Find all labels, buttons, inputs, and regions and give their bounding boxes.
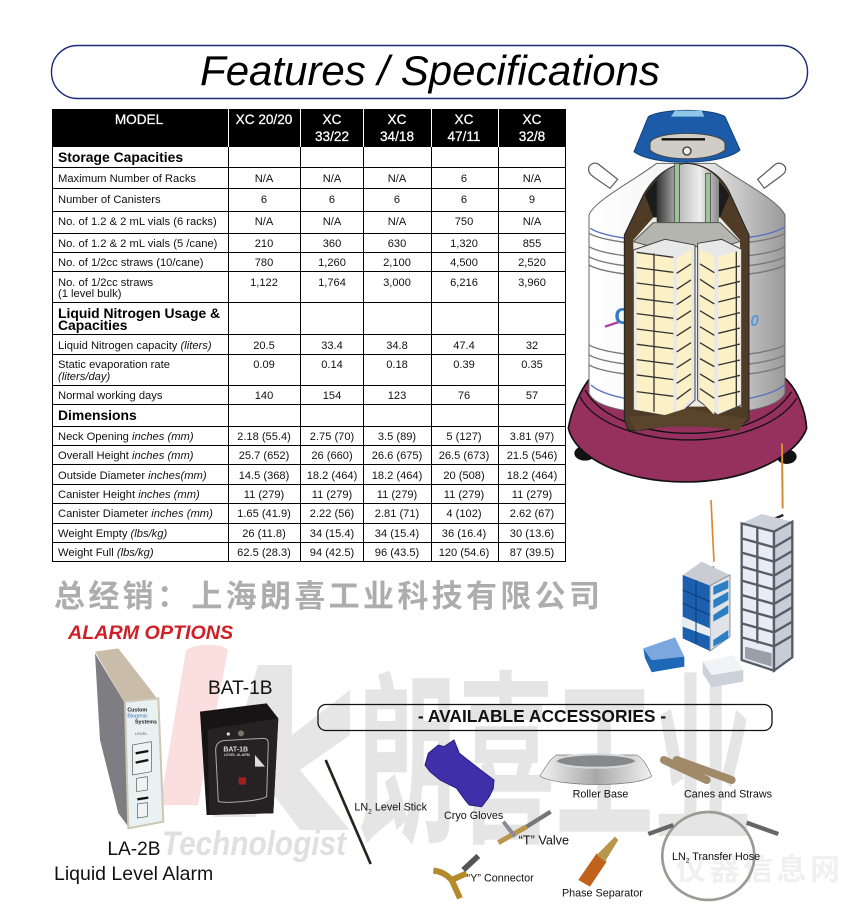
row: working days: 123 <box>388 390 406 402</box>
label: canes and straws: Canes and Straws <box>684 789 772 801</box>
row: straws bulk: 3,000 <box>383 277 411 289</box>
tank handles <box>589 163 786 188</box>
row: canisters: 6 <box>261 194 267 206</box>
row: evaporation rate: 0.39 <box>453 359 475 371</box>
title banner: Features / Specifications <box>200 47 660 94</box>
label: Y connector: “Y” Connector <box>467 873 534 885</box>
row: straws 10 per cane: 2,100 <box>383 257 411 269</box>
table header <box>52 109 566 147</box>
tank body <box>589 163 785 415</box>
row: straws 10 per cane: 1,260 <box>318 257 346 269</box>
row: canister height: 11 (279) <box>444 489 484 501</box>
section heading: liquid nitrogen: Capacities <box>58 317 128 333</box>
row: nitrogen capacity: 33.4 <box>321 340 343 352</box>
row: working days: 140 <box>255 390 273 402</box>
row: canister height: 11 (279) <box>312 489 352 501</box>
row: neck opening: 2.18 (55.4) <box>237 431 291 443</box>
label: phase separator: Phase Separator <box>562 888 643 900</box>
row: straws bulk: No. of 1/2cc straws <box>58 277 154 289</box>
accessories banner <box>318 704 772 730</box>
right canister <box>698 239 742 415</box>
device: LA-2B alarm: LEVEL <box>135 731 148 736</box>
row: overall height: Overall Height inches (mm) <box>58 450 194 462</box>
row: straws 10 per cane: 2,520 <box>518 257 546 269</box>
blue cap <box>634 110 740 162</box>
tank ribs and stripes <box>589 227 785 404</box>
row: weight full: 120 (54.6) <box>439 547 489 559</box>
row: weight full: Weight Full (lbs/kg) <box>58 547 154 559</box>
row: neck opening: Neck Opening inches (mm) <box>58 431 194 443</box>
table header: 32/8 <box>519 129 545 144</box>
row: canister diameter <box>58 508 554 520</box>
tall rack with handle <box>742 443 792 671</box>
inner neck tube <box>657 163 719 228</box>
row: vials 6 racks: N/A <box>388 216 407 228</box>
row: overall height: 21.5 (546) <box>507 450 557 462</box>
short rack with blue boxes <box>683 500 730 651</box>
row: evaporation rate: 0.18 <box>386 359 408 371</box>
tank roller base <box>568 378 807 482</box>
T valve <box>498 812 551 843</box>
row: canister diameter: 4 (102) <box>446 508 482 520</box>
row: maximum racks: N/A <box>523 173 542 185</box>
floor hatch of cutaway <box>628 408 747 432</box>
row: evaporation rate: (liters/day) <box>58 371 110 383</box>
device: BAT-1B alarm: BAT-1B <box>223 747 248 754</box>
row: neck opening: 3.81 (97) <box>510 431 554 443</box>
level stick <box>326 760 371 864</box>
row: working days: 57 <box>526 390 538 402</box>
label: level stick: LN <box>354 802 368 814</box>
section heading: dimensions: Dimensions <box>58 407 137 423</box>
row: canister diameter: Canister Diameter inches (mm) <box>58 508 213 520</box>
label: cryo gloves: Cryo Gloves <box>444 810 503 822</box>
title banner <box>52 46 808 98</box>
row: maximum racks <box>58 173 542 185</box>
row: weight empty <box>58 528 554 540</box>
row: vials 5 per cane: 360 <box>323 238 341 250</box>
row: overall height: 26.5 (673) <box>439 450 489 462</box>
row: maximum racks: Maximum Number of Racks <box>58 173 196 185</box>
row: maximum racks: N/A <box>388 173 407 185</box>
row: canisters: 6 <box>461 194 467 206</box>
row: canister height: 11 (279) <box>377 489 417 501</box>
row: canisters: 9 <box>529 194 535 206</box>
panel: accessories <box>326 740 778 900</box>
row: working days: 76 <box>458 390 470 402</box>
panel: alarm devices <box>54 648 278 885</box>
left canister <box>633 239 695 417</box>
device: LA-2B alarm: Systems <box>135 720 157 726</box>
section heading: liquid nitrogen <box>58 305 220 333</box>
table header: XC 20/20 <box>236 112 293 127</box>
row: weight full: 94 (42.5) <box>310 547 354 559</box>
row: maximum racks: N/A <box>255 173 274 185</box>
device: BAT-1B alarm <box>200 703 278 815</box>
row: weight empty: 36 (16.4) <box>442 528 486 540</box>
row: outside diameter: 18.2 (464) <box>307 470 357 482</box>
row: canister diameter: 1.65 (41.9) <box>237 508 291 520</box>
row: straws bulk: 3,960 <box>518 277 546 289</box>
row: weight empty: 26 (11.8) <box>242 528 286 540</box>
label: transfer hose: 2 <box>686 858 690 865</box>
row: weight full: 96 (43.5) <box>375 547 419 559</box>
row: weight empty: 34 (15.4) <box>310 528 354 540</box>
row: vials 5 per cane: 855 <box>523 238 541 250</box>
row: evaporation rate: 0.14 <box>321 359 343 371</box>
watermark: company logo background: Technologist <box>162 825 347 863</box>
section heading: liquid nitrogen: Liquid Nitrogen Usage & <box>58 305 220 321</box>
row: overall height: 26.6 (675) <box>372 450 422 462</box>
row: canisters: 6 <box>394 194 400 206</box>
row: straws bulk <box>58 277 546 300</box>
row: vials 5 per cane: 630 <box>388 238 406 250</box>
row: canister diameter: 2.22 (56) <box>310 508 354 520</box>
table header: XC <box>388 112 407 127</box>
row: straws 10 per cane: 780 <box>255 257 273 269</box>
row: vials 6 racks: 750 <box>455 216 473 228</box>
row: working days: 154 <box>323 390 341 402</box>
tank logo letters: 0 <box>750 313 759 330</box>
Y connector <box>433 856 478 898</box>
row: weight empty: 30 (13.6) <box>510 528 554 540</box>
watermark: company logo background: 仪器信息网 <box>676 845 840 889</box>
table header: XC <box>523 112 542 127</box>
row: canisters: 6 <box>329 194 335 206</box>
inner dark cavity <box>645 164 729 217</box>
row: nitrogen capacity: 20.5 <box>253 340 275 352</box>
blue vial box <box>643 637 684 672</box>
table header: XC <box>455 112 474 127</box>
row: working days: Normal working days <box>58 390 163 402</box>
section heading: storage capacities: Storage Capacities <box>58 149 183 165</box>
label: BAT-1B: BAT-1B <box>208 678 273 699</box>
row: outside diameter: 18.2 (464) <box>372 470 422 482</box>
row: overall height: 26 (660) <box>311 450 353 462</box>
row: vials 5 per cane: No. of 1.2 & 2 mL vials (5 /cane) <box>58 238 218 250</box>
row: vials 6 racks: N/A <box>523 216 542 228</box>
row: straws bulk: 1,122 <box>250 277 278 289</box>
row: straws bulk: 6,216 <box>450 277 478 289</box>
canes and straws <box>664 760 732 780</box>
table header: 33/22 <box>315 129 349 144</box>
label: level stick: Level Stick <box>372 802 428 814</box>
table header: XC <box>323 112 342 127</box>
row: canister height: 11 (279) <box>244 489 284 501</box>
transfer hose <box>648 812 778 900</box>
watermark: company logo background: 朗喜工业 <box>358 612 752 882</box>
row: canisters <box>58 194 535 206</box>
cryo gloves <box>425 740 494 807</box>
row: canister diameter: 2.81 (71) <box>375 508 419 520</box>
label: LA-2B: LA-2B <box>107 839 161 860</box>
row: outside diameter: 20 (508) <box>443 470 485 482</box>
row: outside diameter: Outside Diameter inches(mm) <box>58 470 207 482</box>
label: roller base: Roller Base <box>573 789 628 801</box>
device: BAT-1B alarm: LEVEL ALARM <box>224 753 250 757</box>
row: neck opening <box>58 431 554 443</box>
label: transfer hose: LN <box>672 851 686 863</box>
row: evaporation rate <box>58 359 543 383</box>
row: outside diameter <box>58 470 557 482</box>
row: nitrogen capacity: Liquid Nitrogen capacity (liters) <box>58 340 212 352</box>
row: canister height: Canister Height inches (mm) <box>58 489 200 501</box>
table header: MODEL <box>115 112 164 127</box>
row: maximum racks: 6 <box>461 173 467 185</box>
row: straws bulk: (1 level bulk) <box>58 288 122 300</box>
row: overall height: 25.7 (652) <box>239 450 289 462</box>
row: vials 6 racks: No. of 1.2 & 2 mL vials (6 racks) <box>58 216 217 228</box>
label: T valve: “T” Valve <box>519 834 569 848</box>
heading: alarm options: ALARM OPTIONS <box>67 622 233 644</box>
row: vials 6 racks: N/A <box>255 216 274 228</box>
device: LA-2B alarm <box>95 648 163 828</box>
row: nitrogen capacity: 34.8 <box>386 340 408 352</box>
illustration: cutaway nitrogen tank <box>568 110 807 482</box>
roller base <box>540 754 652 784</box>
row: evaporation rate: 0.35 <box>521 359 543 371</box>
row: neck opening: 5 (127) <box>446 431 482 443</box>
row: canister height: 11 (279) <box>512 489 552 501</box>
row: weight empty: 34 (15.4) <box>375 528 419 540</box>
row: neck opening: 3.5 (89) <box>378 431 416 443</box>
row: working days <box>58 390 538 402</box>
row: weight full <box>58 547 554 559</box>
row: canisters: Number of Canisters <box>58 194 161 206</box>
row: canister diameter: 2.62 (67) <box>510 508 554 520</box>
phase separator <box>578 837 618 887</box>
tank interior <box>633 217 742 407</box>
canister support ring <box>633 223 740 247</box>
device: LA-2B alarm: Custom <box>127 708 147 714</box>
label: liquid level alarm: Liquid Level Alarm <box>54 863 213 885</box>
watermark: company logo background <box>160 612 840 889</box>
brown insulation cutaway <box>624 163 749 431</box>
row: vials 6 racks <box>58 216 542 228</box>
white vial box <box>703 655 743 687</box>
row: straws 10 per cane: 4,500 <box>450 257 478 269</box>
illustration: canister racks <box>643 443 792 687</box>
row: neck opening: 2.75 (70) <box>310 431 354 443</box>
row: vials 6 racks: N/A <box>323 216 342 228</box>
label: transfer hose: Transfer Hose <box>689 851 760 863</box>
row: canister height <box>58 489 552 501</box>
row: straws bulk: 1,764 <box>318 277 346 289</box>
label: level stick: 2 <box>368 808 372 815</box>
row: weight full: 62.5 (28.3) <box>237 547 291 559</box>
table header: 34/18 <box>380 129 414 144</box>
distributor line in Chinese: 总经销：上海朗喜工业科技有限公司 <box>54 579 600 614</box>
row: vials 5 per cane: 1,320 <box>450 238 478 250</box>
row: nitrogen capacity: 32 <box>526 340 538 352</box>
tank logo letters: C <box>614 303 631 329</box>
row: evaporation rate: Static evaporation rate <box>58 359 170 371</box>
row: overall height <box>58 450 557 462</box>
row: weight full: 87 (39.5) <box>510 547 554 559</box>
row: straws 10 per cane <box>58 257 546 269</box>
accessories banner: - AVAILABLE ACCESSORIES - <box>418 706 666 726</box>
row: nitrogen capacity <box>58 340 538 352</box>
row: vials 5 per cane <box>58 238 541 250</box>
row: vials 5 per cane: 210 <box>255 238 273 250</box>
row: weight empty: Weight Empty (lbs/kg) <box>58 528 167 540</box>
specifications table <box>52 109 566 562</box>
table header: 47/11 <box>447 129 481 144</box>
row: outside diameter: 18.2 (464) <box>507 470 557 482</box>
tank logo letters <box>614 303 759 330</box>
row: evaporation rate: 0.09 <box>253 359 275 371</box>
row: nitrogen capacity: 47.4 <box>453 340 475 352</box>
row: straws 10 per cane: No. of 1/2cc straws (10/cane) <box>58 257 204 269</box>
device: LA-2B alarm: Biogenic <box>127 714 148 720</box>
row: outside diameter: 14.5 (368) <box>239 470 289 482</box>
row: maximum racks: N/A <box>323 173 342 185</box>
